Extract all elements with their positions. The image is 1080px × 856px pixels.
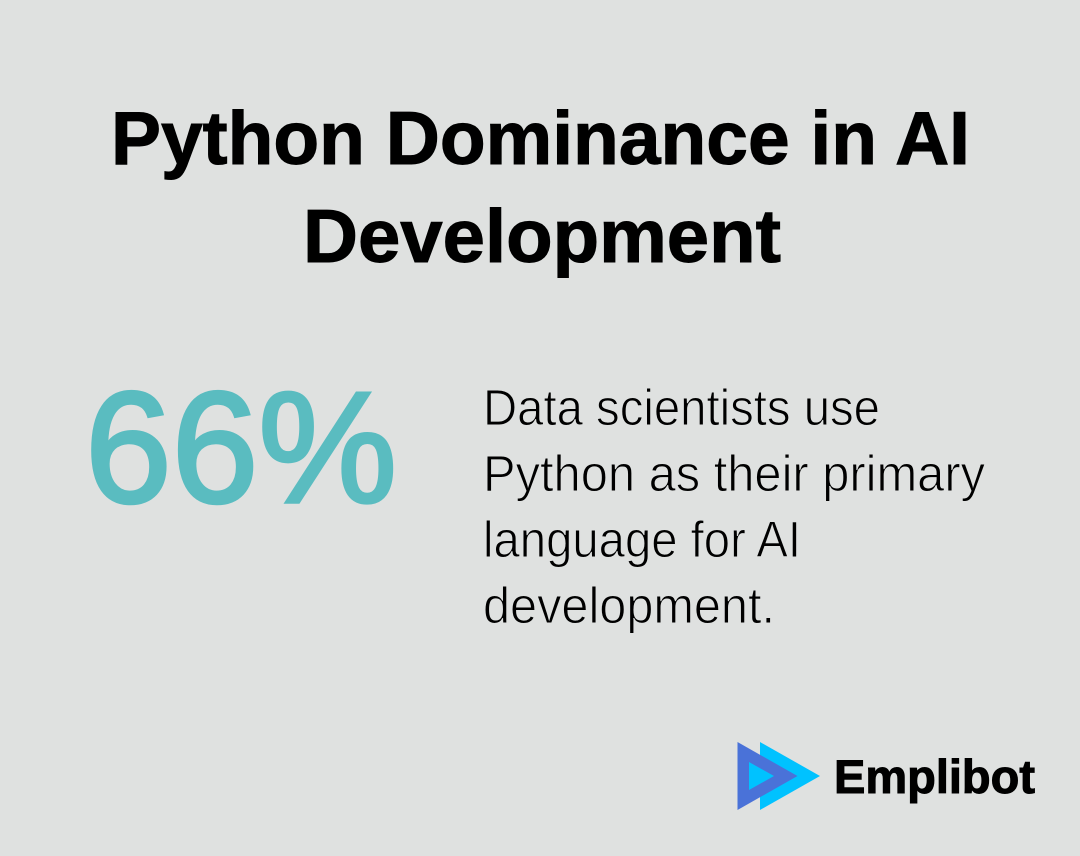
title: Development [303, 194, 781, 278]
description text: development. [483, 577, 775, 634]
logo: Emplibot [738, 742, 1035, 810]
description text [483, 379, 985, 634]
description text: Python as their primary [483, 445, 985, 502]
description text: Data scientists use [483, 379, 880, 436]
statistic: 66%: 66% [85, 360, 397, 536]
logo wordmark: Emplibot [834, 750, 1035, 803]
icon: play triangles [738, 742, 820, 810]
title [111, 96, 970, 278]
description text: language for AI [483, 511, 801, 568]
title: Python Dominance in AI [111, 96, 970, 180]
